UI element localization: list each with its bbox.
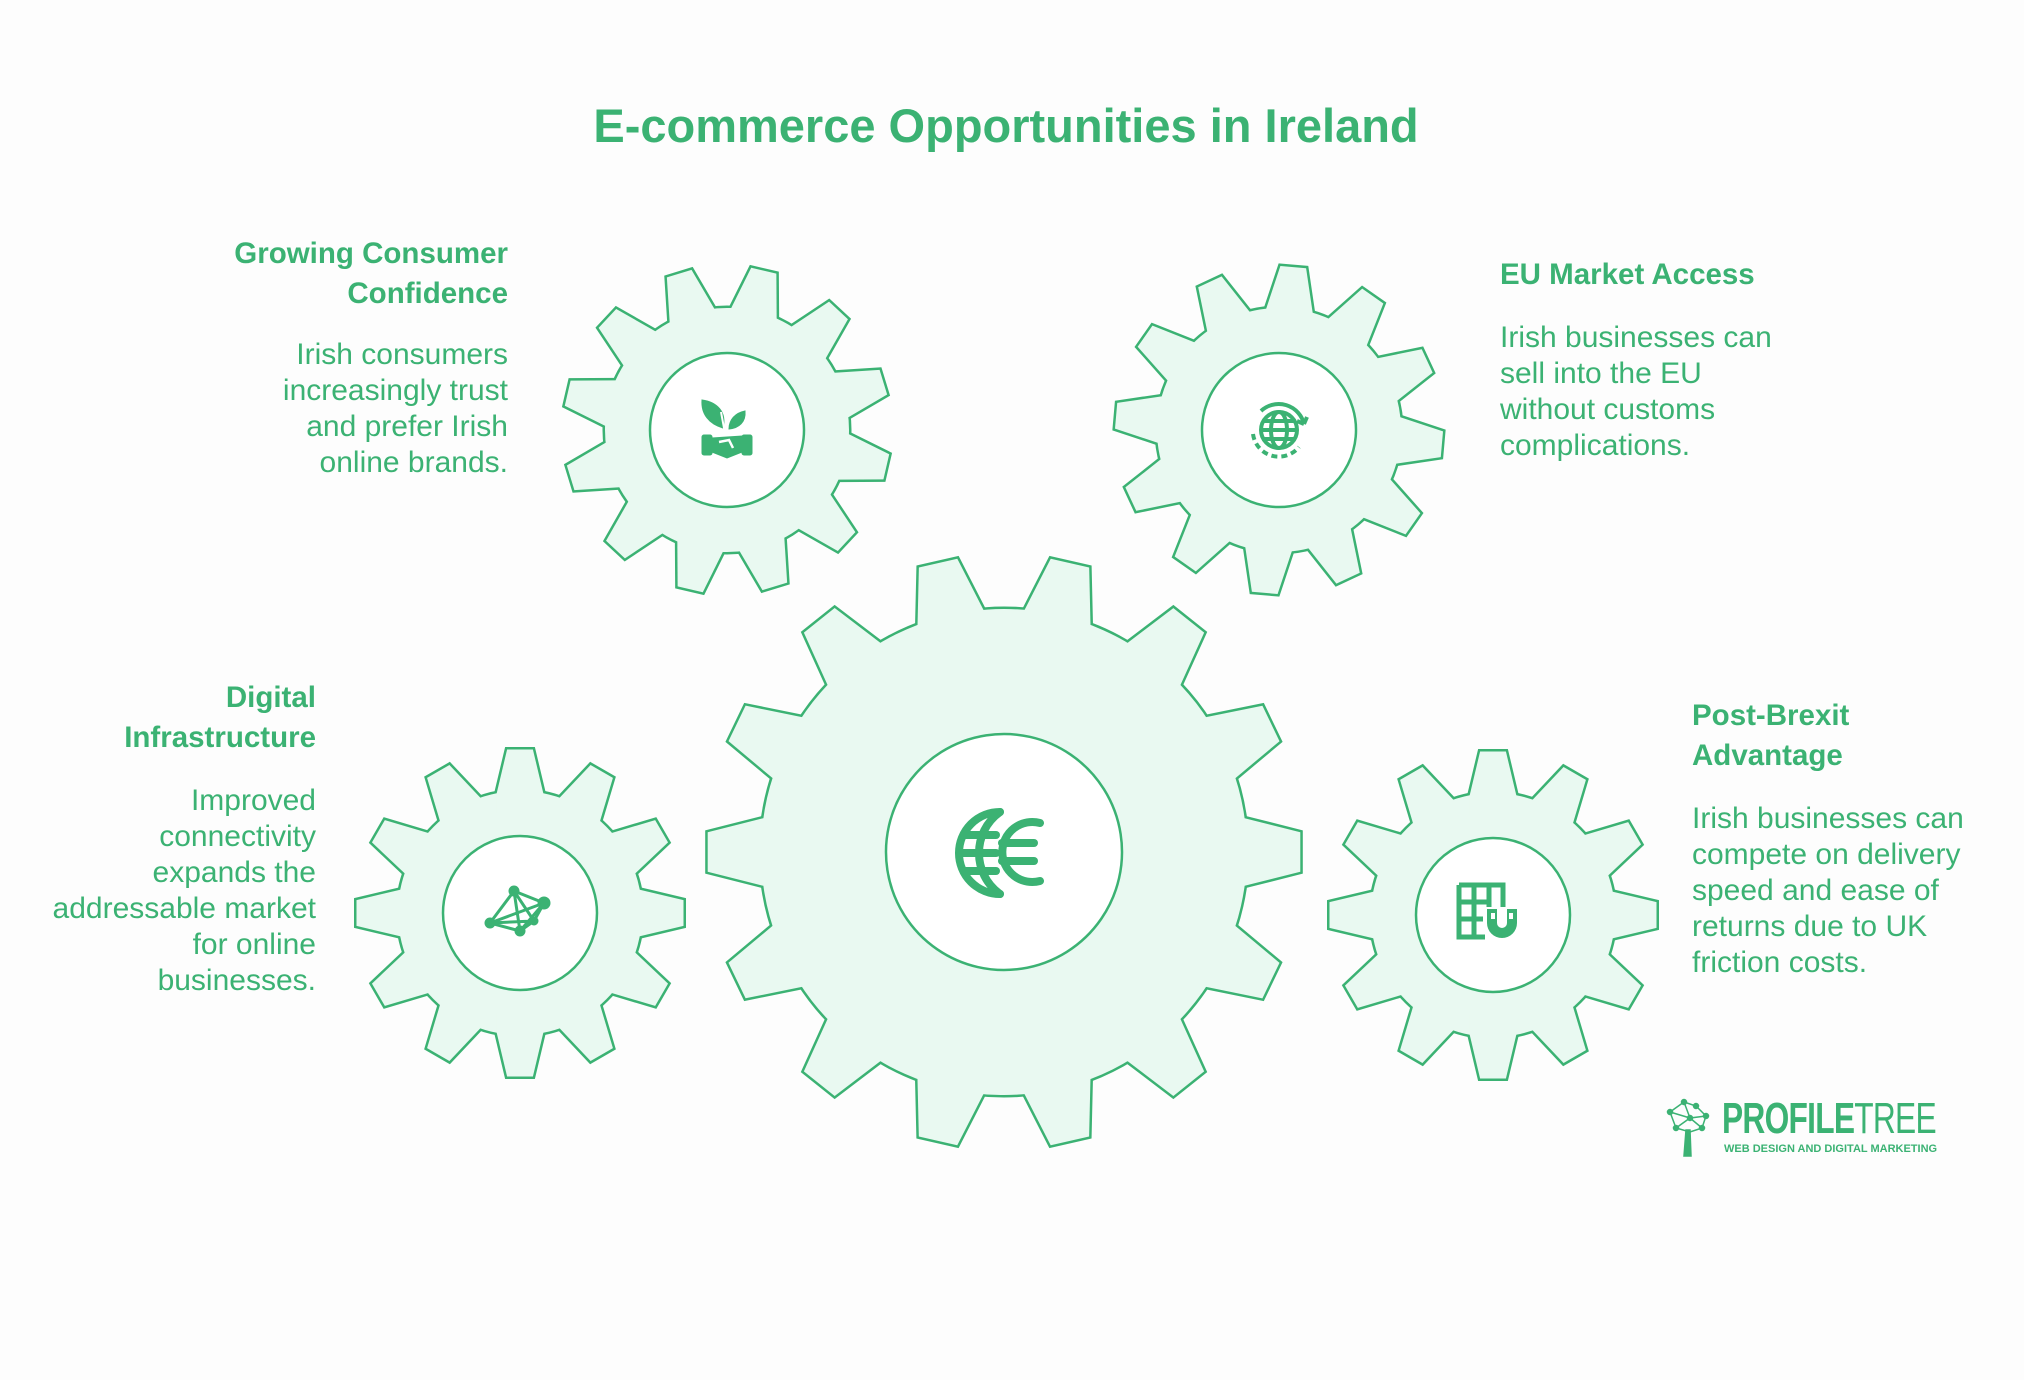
logo: ProfileTree [1666,1094,1937,1157]
icon: grid with magnet [1459,885,1517,938]
text: Growing Consumer Confidence: online brands. [320,446,508,479]
text: Post-Brexit Advantage: returns due to UK [1692,910,1927,943]
text: Growing Consumer Confidence: Irish consumers [296,338,508,371]
gear: bottom-left [356,750,684,1076]
gear: top-right [1102,253,1456,607]
logo: ProfileTree: PROFILETREE [1722,1094,1936,1143]
text: Post-Brexit Advantage: Irish businesses can [1692,802,1964,835]
text: Digital Infrastructure: connectivity [159,820,316,853]
text: Post-Brexit Advantage [1692,699,1964,979]
text: Digital Infrastructure: Improved [191,784,316,817]
text: EU Market Access: Irish businesses can [1500,321,1772,354]
gear: top-left [531,234,923,626]
icon: euro globe [959,812,1040,894]
text: EU Market Access [1500,258,1772,462]
gear: bottom-right [1330,752,1656,1078]
text: EU Market Access: sell into the EU [1500,357,1702,390]
text: Growing Consumer Confidence: and prefer Irish [306,410,508,443]
icon: network mesh [486,887,549,935]
logo: ProfileTree: WEB DESIGN AND DIGITAL MARKETING [1724,1143,1937,1155]
icon: plant with handshake [702,400,752,458]
icon: globe with refresh [1253,404,1307,457]
text: Post-Brexit Advantage: compete on delivery [1692,838,1960,871]
text: Post-Brexit Advantage: Advantage [1692,739,1843,772]
text: EU Market Access: complications. [1500,429,1690,462]
text: EU Market Access: without customs [1500,393,1715,426]
text: Post-Brexit Advantage: Post-Brexit [1692,699,1849,732]
text: EU Market Access: EU Market Access [1500,258,1755,291]
text: Post-Brexit Advantage: friction costs. [1692,946,1867,979]
text: Digital Infrastructure: businesses. [158,964,316,997]
text: Digital Infrastructure: Infrastructure [124,721,316,754]
text: Digital Infrastructure [53,681,316,997]
text: Growing Consumer Confidence: increasingly trust [283,374,508,407]
text: Growing Consumer Confidence: Confidence [347,277,508,310]
text: Post-Brexit Advantage: speed and ease of [1692,874,1939,907]
text: Growing Consumer Confidence [234,237,508,479]
title: E-commerce Opportunities in Ireland [593,99,1419,152]
text: Digital Infrastructure: Digital [226,681,316,714]
text: Digital Infrastructure: expands the [153,856,316,889]
text: Growing Consumer Confidence: Growing Consumer [234,237,508,270]
text: Digital Infrastructure: for online [193,928,316,961]
gear: central [649,497,1359,1207]
text: Digital Infrastructure: addressable market [53,892,316,925]
